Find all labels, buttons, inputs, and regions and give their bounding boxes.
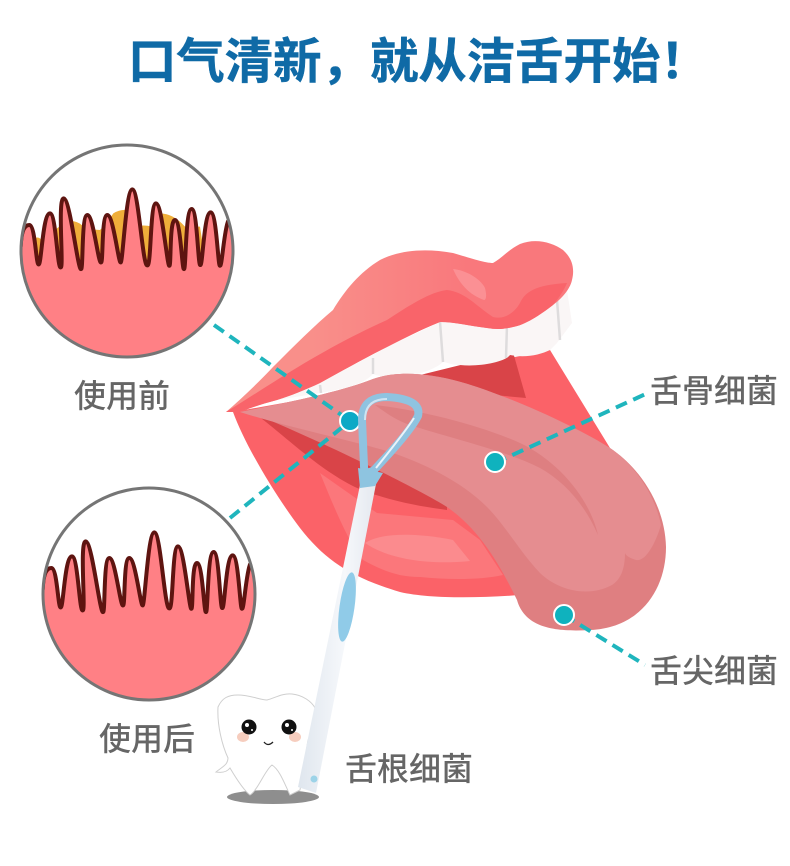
title: 口气清新，就从洁舌开始！ (128, 35, 709, 89)
lower lip highlight (365, 535, 470, 562)
upper lip shade (226, 283, 567, 412)
tongue surface with papillae (22, 191, 232, 356)
teeth (277, 290, 572, 400)
label: tongue tip bacteria: 舌尖细菌 (650, 653, 778, 689)
lower lip (233, 350, 620, 597)
icon: tooth mascot (216, 694, 319, 804)
callout line: before circle to tongue root (214, 325, 350, 421)
callout line: tongue middle (495, 392, 650, 463)
scraper grip (335, 571, 359, 643)
label: hyoid bacteria: 舌骨细菌 (650, 373, 778, 409)
panel: after-use circle (35, 488, 262, 706)
mouth interior (257, 415, 447, 510)
upper lip (226, 241, 573, 412)
label: before use: 使用前 (74, 378, 170, 414)
callout line: tongue tip (564, 615, 645, 665)
label: after use: 使用后 (99, 721, 195, 757)
tooth body (216, 694, 318, 795)
label: tongue root bacteria: 舌根细菌 (345, 751, 473, 787)
icon: tongue scraper (298, 397, 418, 793)
callout line: after circle to tongue root (230, 421, 350, 518)
tongue top surface (240, 374, 661, 591)
tooth smile (264, 742, 273, 744)
tooth blush (237, 732, 301, 742)
marker: tongue tip (554, 605, 574, 625)
scraper base dot (310, 776, 318, 782)
lip highlight (453, 269, 486, 300)
panel: before-use circle (13, 145, 240, 363)
tooth eyes (242, 720, 296, 734)
clean tongue surface with papillae (44, 530, 254, 698)
tooth shadow (227, 790, 319, 804)
plaque deposits (36, 210, 202, 260)
tongue center groove (375, 405, 598, 535)
scraper head loop (362, 397, 418, 472)
tongue (240, 374, 666, 630)
marker: tongue root (340, 411, 360, 431)
marker: tongue middle (485, 452, 505, 472)
scraper neck (358, 468, 383, 488)
lower lip mid band (320, 473, 503, 579)
illustration: mouth (226, 241, 666, 630)
scraper handle (298, 484, 376, 793)
